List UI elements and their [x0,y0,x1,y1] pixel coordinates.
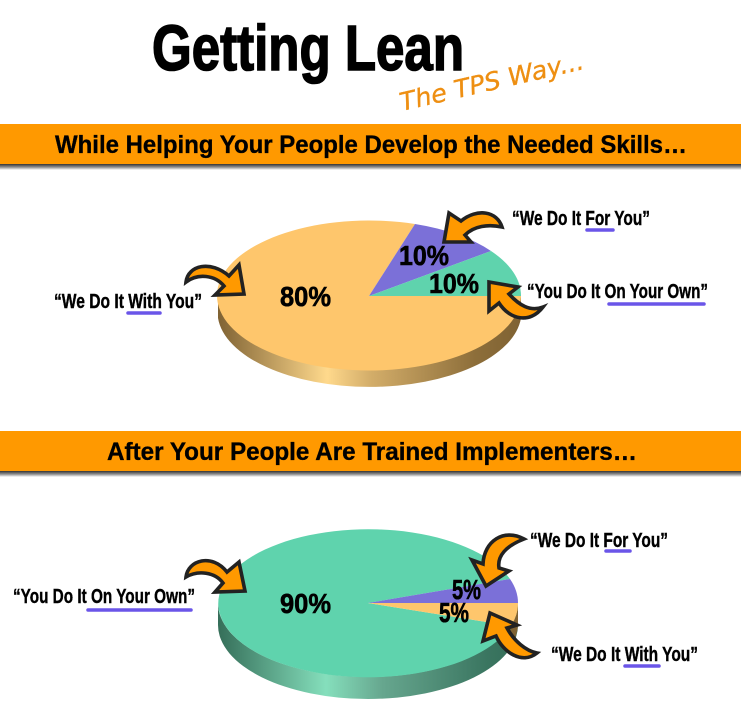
slice: we do it for you 5% [368,579,518,603]
arrow: with you [186,265,244,295]
side of orange slice [508,603,518,650]
value 90%: 90% [280,588,331,619]
slice: we do it for you 10% [369,224,491,296]
pie side [218,296,521,387]
title: Getting Lean [152,12,464,84]
banner: after trained [0,431,741,477]
arrow: for you [472,535,524,586]
slice: we do it with you 80% [217,220,521,370]
arrow: on your own [489,282,543,318]
label: we do it with you: “We Do It With You” [54,291,202,313]
slice: you do it on your own 10% [369,251,521,296]
value 80%: 80% [280,281,331,312]
label: we do it for you: “We Do It For You” [530,530,668,552]
banner: while helping: While Helping Your People Develop the Needed Skills… [55,131,687,159]
slice: we do it with you 5% [368,603,518,626]
banner: after trained: After Your People Are Trained Implementers… [107,438,637,466]
pie chart: second 90/5/5 [218,529,518,699]
arrow: on your own [186,561,245,592]
slice: you do it on your own 90% [218,529,511,677]
value 10% green: 10% [429,268,479,299]
pie side [218,603,518,699]
label: we do it with you: “We Do It With You” [551,644,698,666]
label: you do it on your own: “You Do It On Your Own” [13,586,195,608]
value 5% purple: 5% [452,574,481,605]
arrow: for you [444,213,502,242]
label: we do it for you: “We Do It For You” [512,208,650,230]
subtitle: The TPS Way: The TPS Way... [397,46,587,117]
value 10% purple: 10% [399,240,449,271]
value 5% orange: 5% [439,597,469,628]
arrow: with you [483,613,537,658]
pie chart: first 80/10/10 [217,220,521,387]
banner: while helping [0,124,741,170]
